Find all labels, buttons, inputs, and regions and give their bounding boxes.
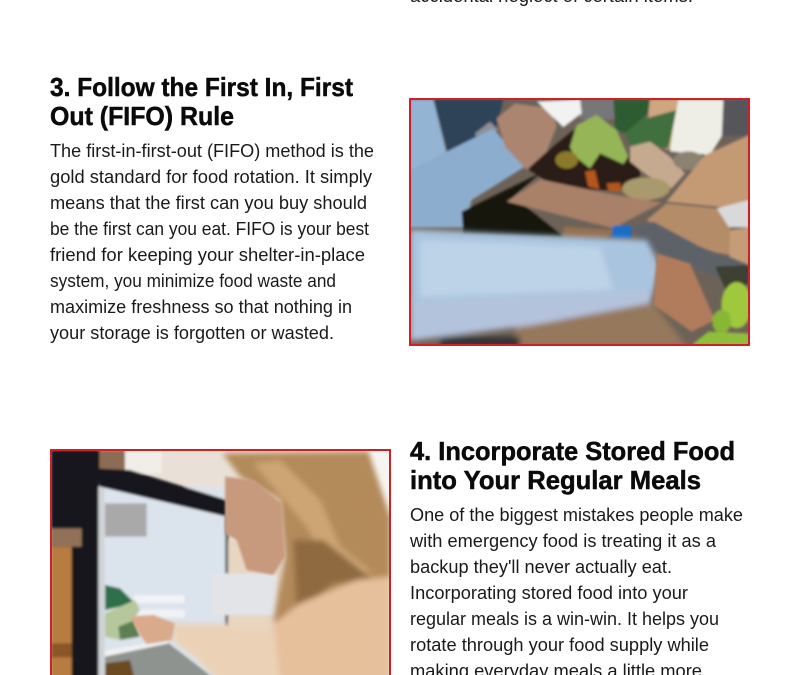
section 4 body text: backup they'll never actually eat. [410,557,672,577]
section 3 body text: your storage is forgotten or wasted. [50,323,334,343]
section 4 body text: One of the biggest mistakes people make [410,505,743,525]
section 3 body text: friend for keeping your shelter-in-place [50,245,365,265]
section 4 body text: Incorporating stored food into your [410,583,688,603]
section 3 body text: The first-in-first-out (FIFO) method is the [50,141,374,161]
photo: woman reaching into a refrigerator [51,450,392,675]
section 3 body text: system, you minimize food waste and [50,271,336,291]
section 4 heading: 4. Incorporate Stored Food [410,436,735,466]
section 4 body text [409,505,743,675]
section 4 heading: into Your Regular Meals [410,465,701,495]
section 3 body text: gold standard for food rotation. It simply [50,167,372,187]
section 4 body text: regular meals is a win-win. It helps you [410,609,719,629]
section 3 heading [50,72,353,131]
photo: hands packing a food box [410,99,752,347]
section 3 body text: maximize freshness so that nothing in [50,297,352,317]
section 4 body text: with emergency food is treating it as a [409,531,717,551]
section 3 heading: Out (FIFO) Rule [50,101,234,131]
section 4 body text: rotate through your food supply while [410,635,709,655]
section 4 heading [410,436,735,495]
photo 4 border [51,450,390,675]
section 3 body text: be the first can you eat. FIFO is your best [50,219,369,239]
photo 3 border [410,99,749,345]
section 3 body text: means that the first can you buy should [50,193,367,213]
section 3 body text [50,141,374,343]
section 3 heading: 3. Follow the First In, First [50,72,353,102]
